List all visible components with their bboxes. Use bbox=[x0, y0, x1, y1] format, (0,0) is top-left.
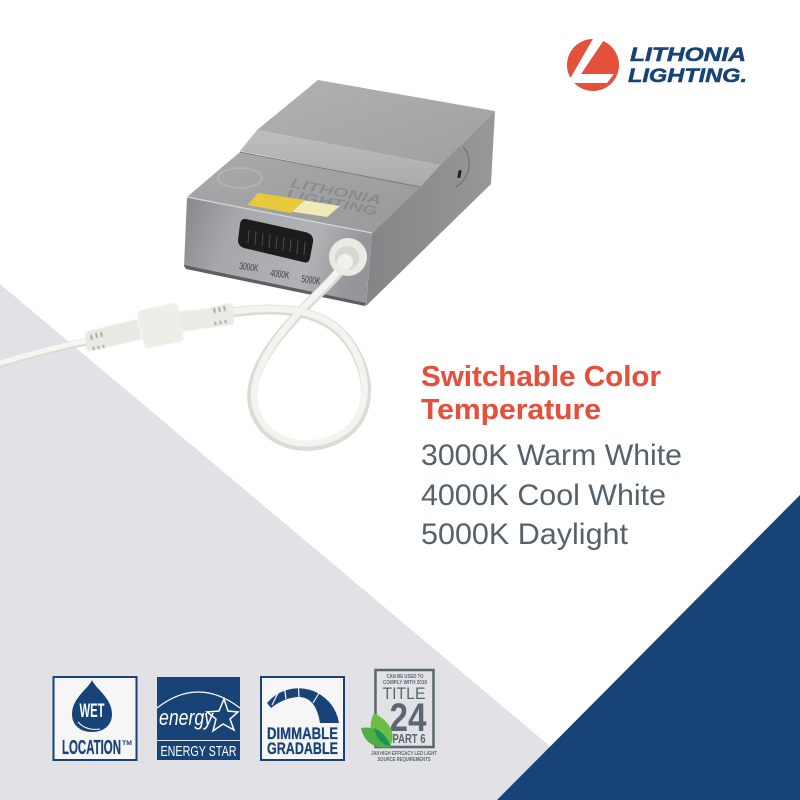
text block: colour temperature options: 5000K Daylight bbox=[421, 518, 629, 551]
badge: title 24: JA8 HIGH EFFICACY LED LIGHT bbox=[371, 751, 437, 757]
logo: Lithonia Lighting bbox=[560, 37, 747, 91]
badge: dimmable gradable bbox=[261, 677, 344, 760]
icon: dimming arc bbox=[267, 680, 339, 723]
text block: feature heading: Switchable Color bbox=[421, 361, 661, 393]
icon: green leaves bbox=[361, 713, 393, 748]
badge: wet location bbox=[54, 677, 136, 760]
badge: title 24: SOURCE REQUIREMENTS bbox=[378, 757, 431, 763]
box: rear lid bbox=[257, 80, 495, 165]
badge: title 24: CAN BE USED TO bbox=[386, 674, 424, 680]
icon: energy star script and star: energy bbox=[159, 705, 215, 730]
background: grey diagonal panel bbox=[0, 284, 552, 800]
switch labels: 4000K bbox=[270, 268, 290, 282]
box: front face bbox=[184, 197, 372, 305]
badge: title 24: COMPLY WITH 2019 bbox=[383, 680, 427, 686]
knockout on side bbox=[456, 147, 469, 187]
text block: colour temperature options: 4000K Cool White bbox=[421, 479, 666, 512]
badge: title 24 bbox=[361, 670, 437, 763]
embossed logo on top panel: LITHONIA bbox=[289, 175, 383, 207]
badge: energy star bbox=[157, 677, 240, 760]
grommet bbox=[329, 238, 367, 276]
logo wordmark bbox=[628, 45, 747, 87]
switch labels: 5000K bbox=[301, 274, 321, 288]
badge: wet location: TM bbox=[122, 741, 132, 747]
connector bbox=[85, 303, 234, 351]
icon: logo roundel bbox=[560, 37, 619, 91]
text block: colour temperature options bbox=[421, 439, 682, 551]
badge: energy star: ENERGY STAR bbox=[160, 744, 236, 760]
cable loop bbox=[228, 262, 366, 446]
logo wordmark: LIGHTING. bbox=[628, 66, 747, 87]
badge: dimmable gradable: GRADABLE bbox=[267, 739, 338, 758]
product photo: driver box with cable bbox=[0, 80, 495, 446]
badge: wet location: LOCATION bbox=[62, 737, 121, 759]
badge: dimmable gradable: DIMMABLE bbox=[267, 724, 338, 743]
box: right side bbox=[366, 111, 495, 306]
background: navy corner triangle bbox=[497, 495, 800, 800]
seam between band and top panel bbox=[240, 152, 420, 187]
box: folded band bbox=[240, 130, 440, 187]
box: front top flange highlight bbox=[187, 197, 372, 233]
text block: feature heading bbox=[421, 361, 661, 426]
badge: title 24: 24 bbox=[390, 696, 427, 740]
badge: title 24: PART 6 bbox=[392, 731, 426, 746]
left cable bbox=[0, 340, 90, 364]
icon: water drop: WET bbox=[80, 701, 105, 722]
badge: title 24: TITLE bbox=[382, 684, 426, 703]
box bottom lip bbox=[184, 265, 366, 306]
yellow label bbox=[248, 193, 340, 217]
logo wordmark: LITHONIA bbox=[630, 45, 746, 66]
box: top panel bbox=[187, 152, 420, 233]
text block: feature heading: Temperature bbox=[421, 394, 601, 426]
embossed logo on top panel bbox=[218, 168, 383, 218]
switch labels: 3000K bbox=[239, 261, 259, 275]
black selector switch bbox=[238, 219, 313, 262]
text block: colour temperature options: 3000K Warm White bbox=[421, 439, 682, 472]
switch labels bbox=[239, 261, 321, 288]
embossed logo on top panel: LIGHTING bbox=[285, 186, 379, 218]
